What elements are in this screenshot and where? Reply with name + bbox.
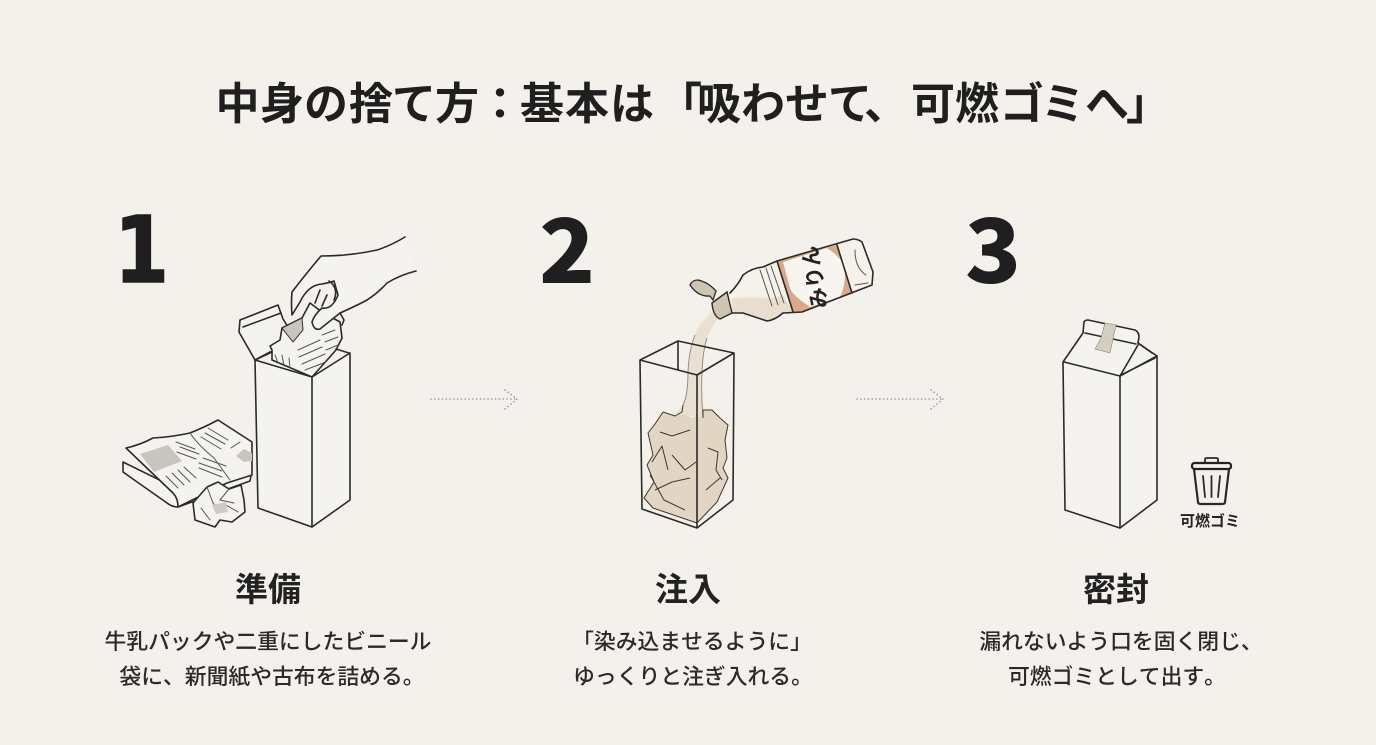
description: 袋に、新聞紙や古布を詰める。 [119, 664, 425, 689]
bottle label: みりん [799, 244, 832, 310]
description: 漏れないよう口を固く閉じ、 [979, 629, 1263, 654]
step number 3: 3 [965, 182, 1021, 308]
illustration: sealed carton [1063, 320, 1157, 528]
arrow 2 to 3 [857, 390, 943, 409]
title: 中身の捨て方：基本は「吸わせて、可燃ゴミへ」 [216, 80, 1170, 129]
illustration: crumpled paper ball [193, 482, 245, 527]
arrow 1 to 2 [431, 390, 517, 409]
step number 2: 2 [539, 182, 595, 308]
panel: step 2 [539, 182, 873, 689]
illustration: carton with paper and hand [239, 237, 416, 527]
description: 可燃ゴミとして出す。 [1008, 664, 1226, 689]
heading: 密封 [1083, 571, 1149, 608]
description: 「染み込ませるように」 [572, 629, 812, 654]
heading: 注入 [655, 571, 721, 608]
tape [1095, 323, 1116, 353]
icon label: 可燃ゴミ [1180, 512, 1240, 530]
description: 牛乳パックや二重にしたビニール [105, 629, 431, 654]
illustration: box with soaked paper [640, 312, 734, 528]
pouring liquid [673, 312, 718, 418]
illustration: pouring bottle [690, 239, 873, 321]
heading: 準備 [235, 571, 301, 608]
illustration: newspaper [123, 420, 252, 507]
panel: step 1 [105, 197, 431, 689]
bottle lid [690, 280, 716, 300]
description: ゆっくりと注ぎ入れる。 [573, 664, 813, 689]
step number 1: 1 [114, 197, 169, 305]
panel: step 3 [965, 182, 1263, 689]
icon: trash can [1192, 458, 1231, 504]
bottle cap ring [712, 292, 732, 319]
